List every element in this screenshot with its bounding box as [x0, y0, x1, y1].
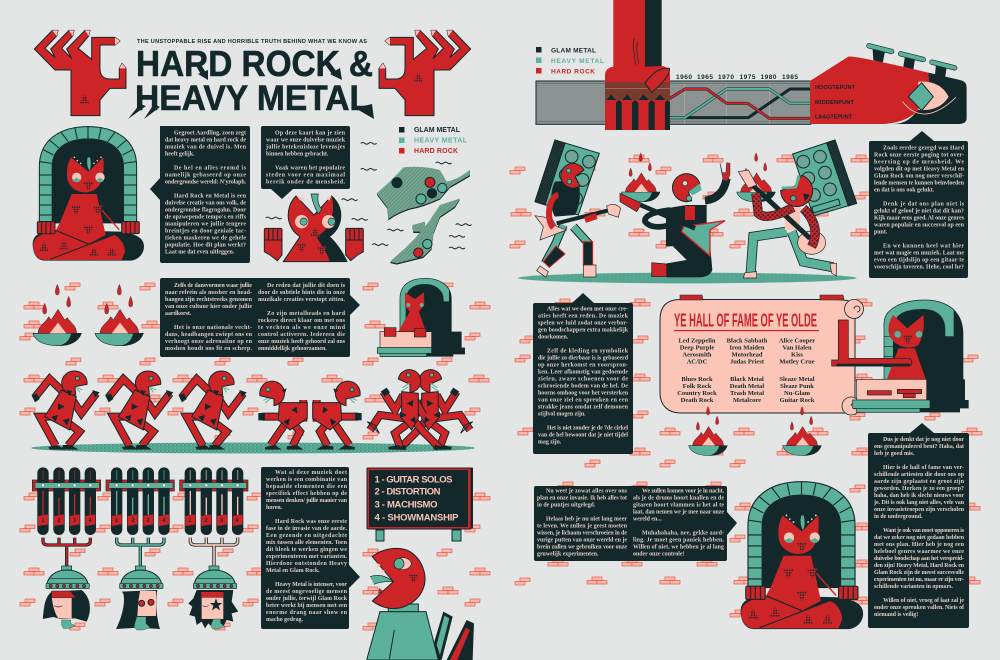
panel: timeline text: Glam Rock om nog meer verschil-: [874, 173, 964, 179]
panel: hall of fame explanation text: Willen of niet, vroeg of laat zal je: [883, 598, 964, 604]
panel: hall of fame explanation text: schillende varianten in opmars.: [874, 584, 953, 590]
panel: hall of fame explanation text: je. Dit is ook lang niet alles, vele van: [873, 500, 965, 506]
panel: invasion text: onder onze controle!: [633, 552, 685, 558]
scroll: hall of fame: Metalcore: [733, 397, 761, 404]
panel: dance text: control activeren. Iedereen die: [258, 332, 345, 338]
musician: kneeling V guitarist: [620, 163, 730, 277]
legend: right page: HARD ROCK: [551, 68, 595, 76]
panel: timeline text: punt.: [874, 229, 888, 235]
illustration: flame bowl lower right: [783, 406, 821, 456]
illustration: small demon at altar: [377, 278, 465, 357]
scroll: hall of fame: Judas Priest: [730, 359, 765, 366]
panel: greeting text: namelijk gebaseerd op onze: [165, 173, 246, 179]
panel: timeline text: [869, 131, 968, 278]
legend: right page: GLAM METAL: [551, 48, 596, 54]
legend: top left page: GLAM METAL: [414, 127, 461, 134]
map: british isles with genre dots: [266, 142, 472, 265]
panel: greeting text: [150, 126, 250, 263]
panel: hall of fame explanation text: niemand is veilig!: [874, 612, 918, 618]
musician: leopard guitarist: [738, 170, 837, 278]
flame bowl on stage right: [737, 153, 775, 202]
rig labels 3: [188, 518, 239, 524]
chart: level labels: [815, 85, 856, 120]
title lightning prongs: [128, 68, 374, 119]
panel: map text: waar we onze duivelse muziek: [266, 138, 346, 144]
panel: greeting text: Hard Rock en Metal is een: [174, 194, 247, 200]
scroll: hall of fame: Black Sabbath: [727, 338, 768, 345]
panel: greeting text: de opzwepende tempo's en riffs: [165, 215, 247, 221]
panel: clothing text: [533, 293, 633, 454]
scroll: hall of fame: Motorhead: [731, 352, 763, 359]
panel: clothing text: op onze herkomst en voorspron-: [538, 363, 628, 369]
rig labels 1: 2: [57, 518, 61, 524]
panel: greeting text: muziek van de duivel is. Men: [165, 145, 247, 151]
chart: years axis: 1960: [676, 74, 692, 81]
panel: music elements text: Wat al deze muziek doet: [275, 470, 347, 476]
panel: greeting text: manipuleren we jullie tengere: [165, 222, 246, 228]
rig labels 2: 1: [115, 518, 118, 524]
panel: greeting text: heeft gelijk.: [165, 152, 195, 158]
panel: map text: steden voor een maximaal: [266, 173, 345, 179]
panel: invasion text: [534, 486, 737, 561]
panel: timeline text: voorschijn toveren. Hehe, cool he?: [874, 264, 964, 270]
panel: timeline text: Rock onze eerste poging tot over-: [874, 152, 964, 158]
flame bowl on stage left: [621, 153, 660, 202]
scroll: hall of fame: Folk Rock: [683, 383, 712, 390]
musician: singer guitarist: [535, 163, 621, 277]
chart: level labels: HOOGTEPUNT: [815, 85, 856, 91]
panel: map text: jullie betekenisloze levensjes: [265, 145, 346, 151]
panel: clothing text: spelen we luid zodat onze verbor-: [538, 321, 628, 327]
panel: hall of fame explanation text: Dus je denkt dat je nog niet door: [883, 437, 964, 443]
scroll: hall of fame: Motley Crue: [779, 359, 815, 366]
panel: timeline text: en dat is ons ook gelukt.: [874, 187, 935, 193]
panel: greeting text: breintjes en door geniale tac-: [165, 229, 246, 235]
illustration: pacman demon presenter: [367, 548, 474, 660]
panel: music elements text: mix tussen alle elementen. Toen: [266, 540, 348, 546]
scroll: hall of fame: Van Halen: [782, 345, 812, 352]
panel: music elements text: horen.: [266, 505, 283, 511]
panel: invasion text: als je de drums hoort knallen en de: [633, 496, 724, 502]
panel: hall of fame explanation text: met ons plan. Hier heb je nog een: [874, 542, 965, 548]
panel: clothing text: die jullie zo dierbaar is is gebaseerd: [538, 356, 629, 362]
panel: timeline text: Kijk maar eens goed. Al onze genres: [874, 215, 965, 221]
hand: left red claw: [34, 30, 126, 116]
sign: four elements: 4 - SHOWMANSHIP: [374, 512, 459, 524]
panel: invasion text: brein zullen we gebruiken voor onze: [537, 545, 627, 551]
panel: timeline text: even een tijdslijn op een gitaar te: [874, 257, 964, 263]
panel: timeline text: En we kunnen heel wat hier: [883, 243, 964, 249]
panel: hall of fame explanation text: onder onze spreuken vallen. Niets of: [874, 605, 965, 611]
panel: hall of fame explanation text: den zijn! Heavy Metal, Hard Rock en: [874, 563, 965, 569]
tube rig 3: [180, 467, 248, 629]
legend: top left page: HARD ROCK: [414, 148, 458, 155]
panel: music elements text: mensen denken/ jullie manier van: [266, 498, 348, 504]
panel: invasion text: te leven. We zullen je geest moeten: [537, 524, 628, 530]
illustration: demon head with fists: [264, 194, 363, 262]
rig labels 3: 2: [204, 518, 208, 524]
panel: clothing text: Het is niet zonder je de 7de cirkel: [547, 426, 628, 432]
panel: hall of fame explanation text: schillende artiesten die door ons op: [874, 472, 965, 478]
rig labels 3: 1: [188, 518, 192, 524]
panel: music elements text: enorme drang naar show en: [266, 610, 348, 616]
panel: dance text: muzikale creaties verstopt zitten.: [258, 297, 346, 303]
panel: dance text: naar refrein als mosher en head-: [165, 290, 252, 296]
panel: invasion text: wissen, je lichaam verschroeien in de: [537, 531, 627, 537]
chart: years axis: [676, 74, 798, 81]
heading: hard rock: HARD ROCK &: [136, 43, 373, 84]
panel: dance text: onze muziek heeft gehoord zal ons: [258, 339, 346, 345]
scroll: hall of fame: Death Metal: [730, 383, 764, 390]
panel: timeline text: Zoals eerder gezegd was Hard: [883, 145, 965, 151]
panel: music elements text: onder jullie, terwijl Glam Rock: [266, 596, 348, 602]
panel: greeting text: duivelse creatie van ons volk, de: [165, 201, 246, 207]
panel: greeting text: De hel en alles eromd is: [174, 166, 247, 172]
scroll: hall of fame: Deep Purple: [680, 345, 714, 352]
panel: dance text: Zo zijn metalheads en hard: [267, 311, 346, 317]
panel: music elements text: bepaalde elementen die een: [266, 484, 348, 490]
panel: hall of fame explanation text: geworden. Herken je zo een groep?: [874, 486, 964, 492]
panel: music elements text: Hard Rock was onze eerste: [275, 519, 347, 525]
panel: music elements text: werken is een combinatie van: [266, 477, 348, 483]
rig labels 3: 4: [235, 518, 239, 524]
illustration: flame bowl 1: [33, 284, 81, 346]
panel: dance text: door de subtiele hints die in onze: [258, 290, 345, 296]
panel: clothing text: stijlvol mogen zijn.: [538, 412, 586, 418]
panel: invasion text: vurige putten van onze wereld en je: [537, 538, 627, 544]
panel: clothing text: zielen, zware schoenen voor de: [538, 377, 628, 383]
illustration: demon holding scroll at altar: [832, 300, 969, 412]
title block: [34, 30, 471, 119]
panel: music elements text: Een gezonde en uitgedachte: [266, 533, 347, 539]
panel: music elements text: [261, 467, 360, 629]
scroll: hall of fame: Blues Rock: [681, 376, 713, 383]
rig labels 2: 4: [162, 518, 166, 524]
panel: map text: Vaak waren het populaire: [275, 166, 345, 172]
subtitle: THE UNSTOPPABLE RISE AND HORRIBLE TRUTH BEHIND WHAT WE KNOW AS: [137, 39, 367, 45]
scroll: hall of fame: Aerosmith: [682, 352, 712, 359]
panel: dance text: onmiddellijk gehoorzamen.: [258, 346, 327, 352]
hand: right red claw: [379, 30, 471, 116]
panel: invasion text: gruwelijk experimenten.: [537, 552, 599, 558]
chart: level labels: LAAGTEPUNT: [815, 114, 853, 120]
panel: dance text: aardkorst.: [165, 311, 192, 317]
panel: hall of fame explanation text: haha, dan heb ik slecht nieuws voor: [874, 493, 964, 499]
panel: dance text: [160, 278, 360, 357]
panel: map text: Op deze kaart kan je zien: [275, 131, 346, 137]
panel: hall of fame explanation text: duivelse boodschap aan het verspreid-: [874, 556, 964, 562]
panel: greeting text: tieken maskeren we de gehele: [165, 236, 246, 242]
panel: dance text: De reden dat jullie dit doen is: [267, 283, 346, 289]
ground: band stage: [518, 273, 857, 283]
scroll: hall of fame: AC/DC: [687, 359, 708, 366]
panel: clothing text: ken. Leer afkomstig van gedoemde: [538, 370, 628, 376]
illustration: band with speakers: [518, 140, 857, 283]
panel: invasion text: gitaren hoort vlammen is het al te: [633, 503, 724, 509]
scroll: hall of fame: Trash Metal: [730, 390, 764, 397]
panel: clothing text: mag zijn.: [538, 440, 562, 446]
panel: music elements text: dit bleek te werken gingen we: [266, 547, 347, 553]
panel: dance text: Zelfs de dansvormen waar jullie: [174, 283, 252, 289]
panel: greeting text: populatie. Hoe dit plan werkt?: [165, 243, 246, 249]
legend: top left page: [399, 127, 468, 155]
panel: dance text: te vechten als we onze mind: [258, 325, 346, 331]
panel: map text: binnen hebben gebracht.: [266, 152, 329, 158]
panel: greeting text: ondergrondse wereld: N'yrolaph.: [165, 180, 247, 186]
sign: four elements: 3 - MACHISMO: [374, 500, 438, 510]
panel: greeting text: Gegroet Aardling, zoen zegt: [174, 131, 246, 137]
panel: hall of fame explanation text: Glam Rock zijn de meest succesvolle: [874, 570, 964, 576]
panel: greeting text: ondergrondse flagrogahn. Door: [165, 208, 246, 214]
heading: heavy metal: HEAVY METAL: [135, 79, 370, 118]
panel: greeting text: dat heavy metal en hard rock de: [165, 138, 246, 144]
sign: four elements: 1 - GUITAR SOLOS: [374, 474, 452, 486]
panel: clothing text: schroeiende bodem van de hel. De: [538, 384, 628, 390]
illustration: guitar head with eye: [810, 43, 967, 124]
panel: hall of fame explanation text: experimenten tot nu, maar er zijn ver-: [874, 577, 964, 583]
panel: greeting text: Laat me dat even uitleggen.: [165, 250, 235, 256]
panel: map text: bereik onder de mensheid.: [266, 180, 346, 186]
panel: invasion text: Muhahahaha, nee, gekke aard-: [642, 531, 724, 537]
ground: speckled teal: [31, 442, 475, 454]
rig labels 2: 3: [146, 518, 150, 524]
panel: timeline text: waren populair en succesvol op een: [874, 222, 965, 228]
scroll: hall of fame: YE HALL OF FAME OF YE OLDE: [674, 310, 817, 330]
scroll: hall of fame: Alice Cooper: [779, 338, 815, 345]
sign: four elements: [367, 468, 473, 541]
chart: years axis: 1965: [697, 74, 713, 81]
panel: dance text: van onze cultuur hier onder jullie: [165, 304, 252, 310]
panel: hall of fame explanation text: aarde zijn geplaatst en groot zijn: [874, 479, 965, 485]
panel: music elements text: Hierdoor ontstonden Heavy: [266, 561, 347, 567]
panel: clothing text: hoorns omhoog voor het versterken: [538, 391, 629, 397]
panel: hall of fame explanation text: heb je goed mis.: [874, 451, 915, 457]
panel: music elements text: beter werkt bij mensen met een: [266, 603, 348, 609]
panel: invasion text: wereld en...: [633, 517, 662, 523]
tube rig 2: [106, 467, 174, 630]
panel: music elements text: fase in de invasie van de aarde.: [266, 526, 348, 532]
rig labels 1: [41, 518, 92, 524]
scroll: hall of fame: Black Metal: [730, 376, 764, 383]
panel: dance text: verhoogt onze adrenaline op en: [165, 339, 253, 345]
scroll: hall of fame: Nu-Glam: [784, 390, 811, 397]
panel: dance text: Het is onze nationale vecht-: [174, 325, 252, 331]
speaker right: [793, 140, 857, 216]
panel: clothing text: van onze ziel en spreuken en een: [538, 398, 629, 404]
panel: clothing text: strakke jeans omdat zelf demonen: [538, 405, 629, 411]
scroll: hall of fame: Country Rock: [677, 390, 717, 397]
illustration: flame bowl 2: [95, 284, 143, 346]
panel: invasion text: in de puntjes uitgelegd.: [537, 503, 596, 509]
panel: timeline text: gelukt of geloof je niet dat dit kan?: [874, 208, 964, 214]
sign: four elements: 2 - DISTORTION: [374, 486, 441, 498]
panel: invasion text: ling. Je moet geen paniek hebben.: [633, 538, 725, 544]
panel: music elements text: Heavy Metal is intenser, voor: [275, 582, 347, 588]
scroll: hall of fame: Guitar Rock: [780, 397, 815, 404]
background brick pattern: [20, 155, 982, 630]
rig labels 1: 4: [88, 518, 92, 524]
scroll: hall of fame: Iron Maiden: [729, 345, 765, 352]
rig labels 2: [115, 518, 166, 524]
scroll: hall of fame: Kiss: [791, 352, 803, 359]
panel: hall of fame explanation text: [868, 423, 969, 628]
panel: hall of fame explanation text: dat we zeker nog niet gedaan hebben: [874, 535, 965, 541]
dancers row: [32, 370, 473, 450]
speaker left: [535, 140, 599, 215]
illustration: seated demon under arch: [33, 127, 144, 261]
scroll: hall of fame: Sleaze Metal: [779, 376, 815, 383]
panel: clothing text: aties heeft een reden. De muziek: [538, 314, 629, 320]
scroll: hall of fame: Sleaze Punk: [780, 383, 814, 390]
panel: music elements text: de meest ongevoelige mensen: [266, 589, 348, 595]
chart: years axis: 1975: [740, 74, 756, 81]
panel: dance text: dans, headbangen zwiept ons en: [165, 332, 253, 338]
panel: clothing text: van de hel bewoont dat je niet tijdel: [538, 433, 628, 439]
panel: invasion text: plan en onze invasie. Ik heb alles tot: [537, 496, 627, 502]
panel: music elements text: specifiek effect hebben op de: [266, 491, 347, 497]
rig labels 2: 2: [131, 518, 135, 524]
tube rig 1: [32, 467, 101, 628]
panel: music elements text: experimenteren met varianten.: [266, 554, 348, 560]
panel: hall of fame explanation text: ons gemanipuleerd bent? Haha, dat: [874, 444, 964, 450]
panel: hall of fame explanation text: Want je ook van moet opponeren is: [883, 528, 965, 534]
chart: years axis: 1985: [782, 74, 798, 81]
panel: timeline text: heersing op de mensheid. We: [874, 159, 964, 165]
panel: clothing text: Alles wat we doen met onze cre-: [547, 307, 628, 313]
panel: invasion text: laat, dan nemen we je mee naar onze: [633, 510, 724, 516]
legend: right page: HEAVY METAL: [551, 58, 604, 65]
panel: invasion text: Willen of niet, we hebben je al lang: [633, 545, 724, 551]
panel: timeline text: lende mensen te kunnen beïnvloeden: [874, 180, 965, 186]
chart: level labels: MIDDENPUNT: [815, 100, 855, 106]
scroll: hall of fame: [660, 295, 864, 415]
panel: clothing text: doorkomen.: [538, 335, 569, 341]
panel: timeline text: volgden dit op met Heavy Metal en: [874, 166, 965, 172]
panel: hall of fame explanation text: onze invasietroepen zijn verscholen: [874, 507, 965, 513]
panel: dance text: moshen houdt ons fit en scherp.: [165, 346, 253, 352]
panel: clothing text: Zelf de kleding en symboliek: [547, 349, 629, 355]
panel: clothing text: gen boodschappen extra makkelijk: [538, 328, 629, 334]
panel: invasion text: We zullen komen voor je in nacht,: [642, 489, 725, 495]
illustration: seated demon bottom right: [741, 482, 863, 629]
legend: right page: [536, 47, 604, 76]
chart: years axis: 1980: [760, 74, 777, 81]
panel: dance text: bangen zijn rechtstreeks genomen: [165, 297, 253, 303]
panel: map text: [261, 126, 350, 199]
rig labels 1: 3: [73, 518, 76, 524]
panel: invasion text: Nu weet je zowat alles over ons: [546, 489, 628, 495]
panel: music elements text: macho gedrag.: [266, 617, 304, 623]
rig labels 3: 3: [220, 518, 223, 524]
panel: music elements text: Metal en Glam Rock.: [266, 568, 320, 574]
panel: hall of fame explanation text: heleboel genres waarmee we onze: [874, 549, 964, 555]
panel: dance text: rockers direct klaar om met ons: [258, 318, 346, 324]
panel: timeline text: met wat magie en muziek. Laat me: [874, 250, 964, 256]
chart: years axis: 1970: [718, 74, 734, 81]
panel: hall of fame explanation text: Hier is de hall of fame van ver-: [883, 465, 964, 471]
chart: guitar neck timeline: [536, 0, 811, 130]
illustration: flame bowl lower left: [689, 406, 727, 456]
rig labels 1: 1: [41, 518, 45, 524]
panel: timeline text: Denk je dat ons plan niet is: [883, 201, 965, 207]
panel: hall of fame explanation text: in de underground.: [874, 514, 923, 520]
scroll: hall of fame: Led Zeppelin: [678, 338, 716, 345]
legend: top left page: HEAVY METAL: [414, 138, 468, 144]
scroll: hall of fame: Death Rock: [681, 397, 714, 404]
panel: invasion text: Helaas heb je nu niet lang meer: [546, 517, 627, 523]
